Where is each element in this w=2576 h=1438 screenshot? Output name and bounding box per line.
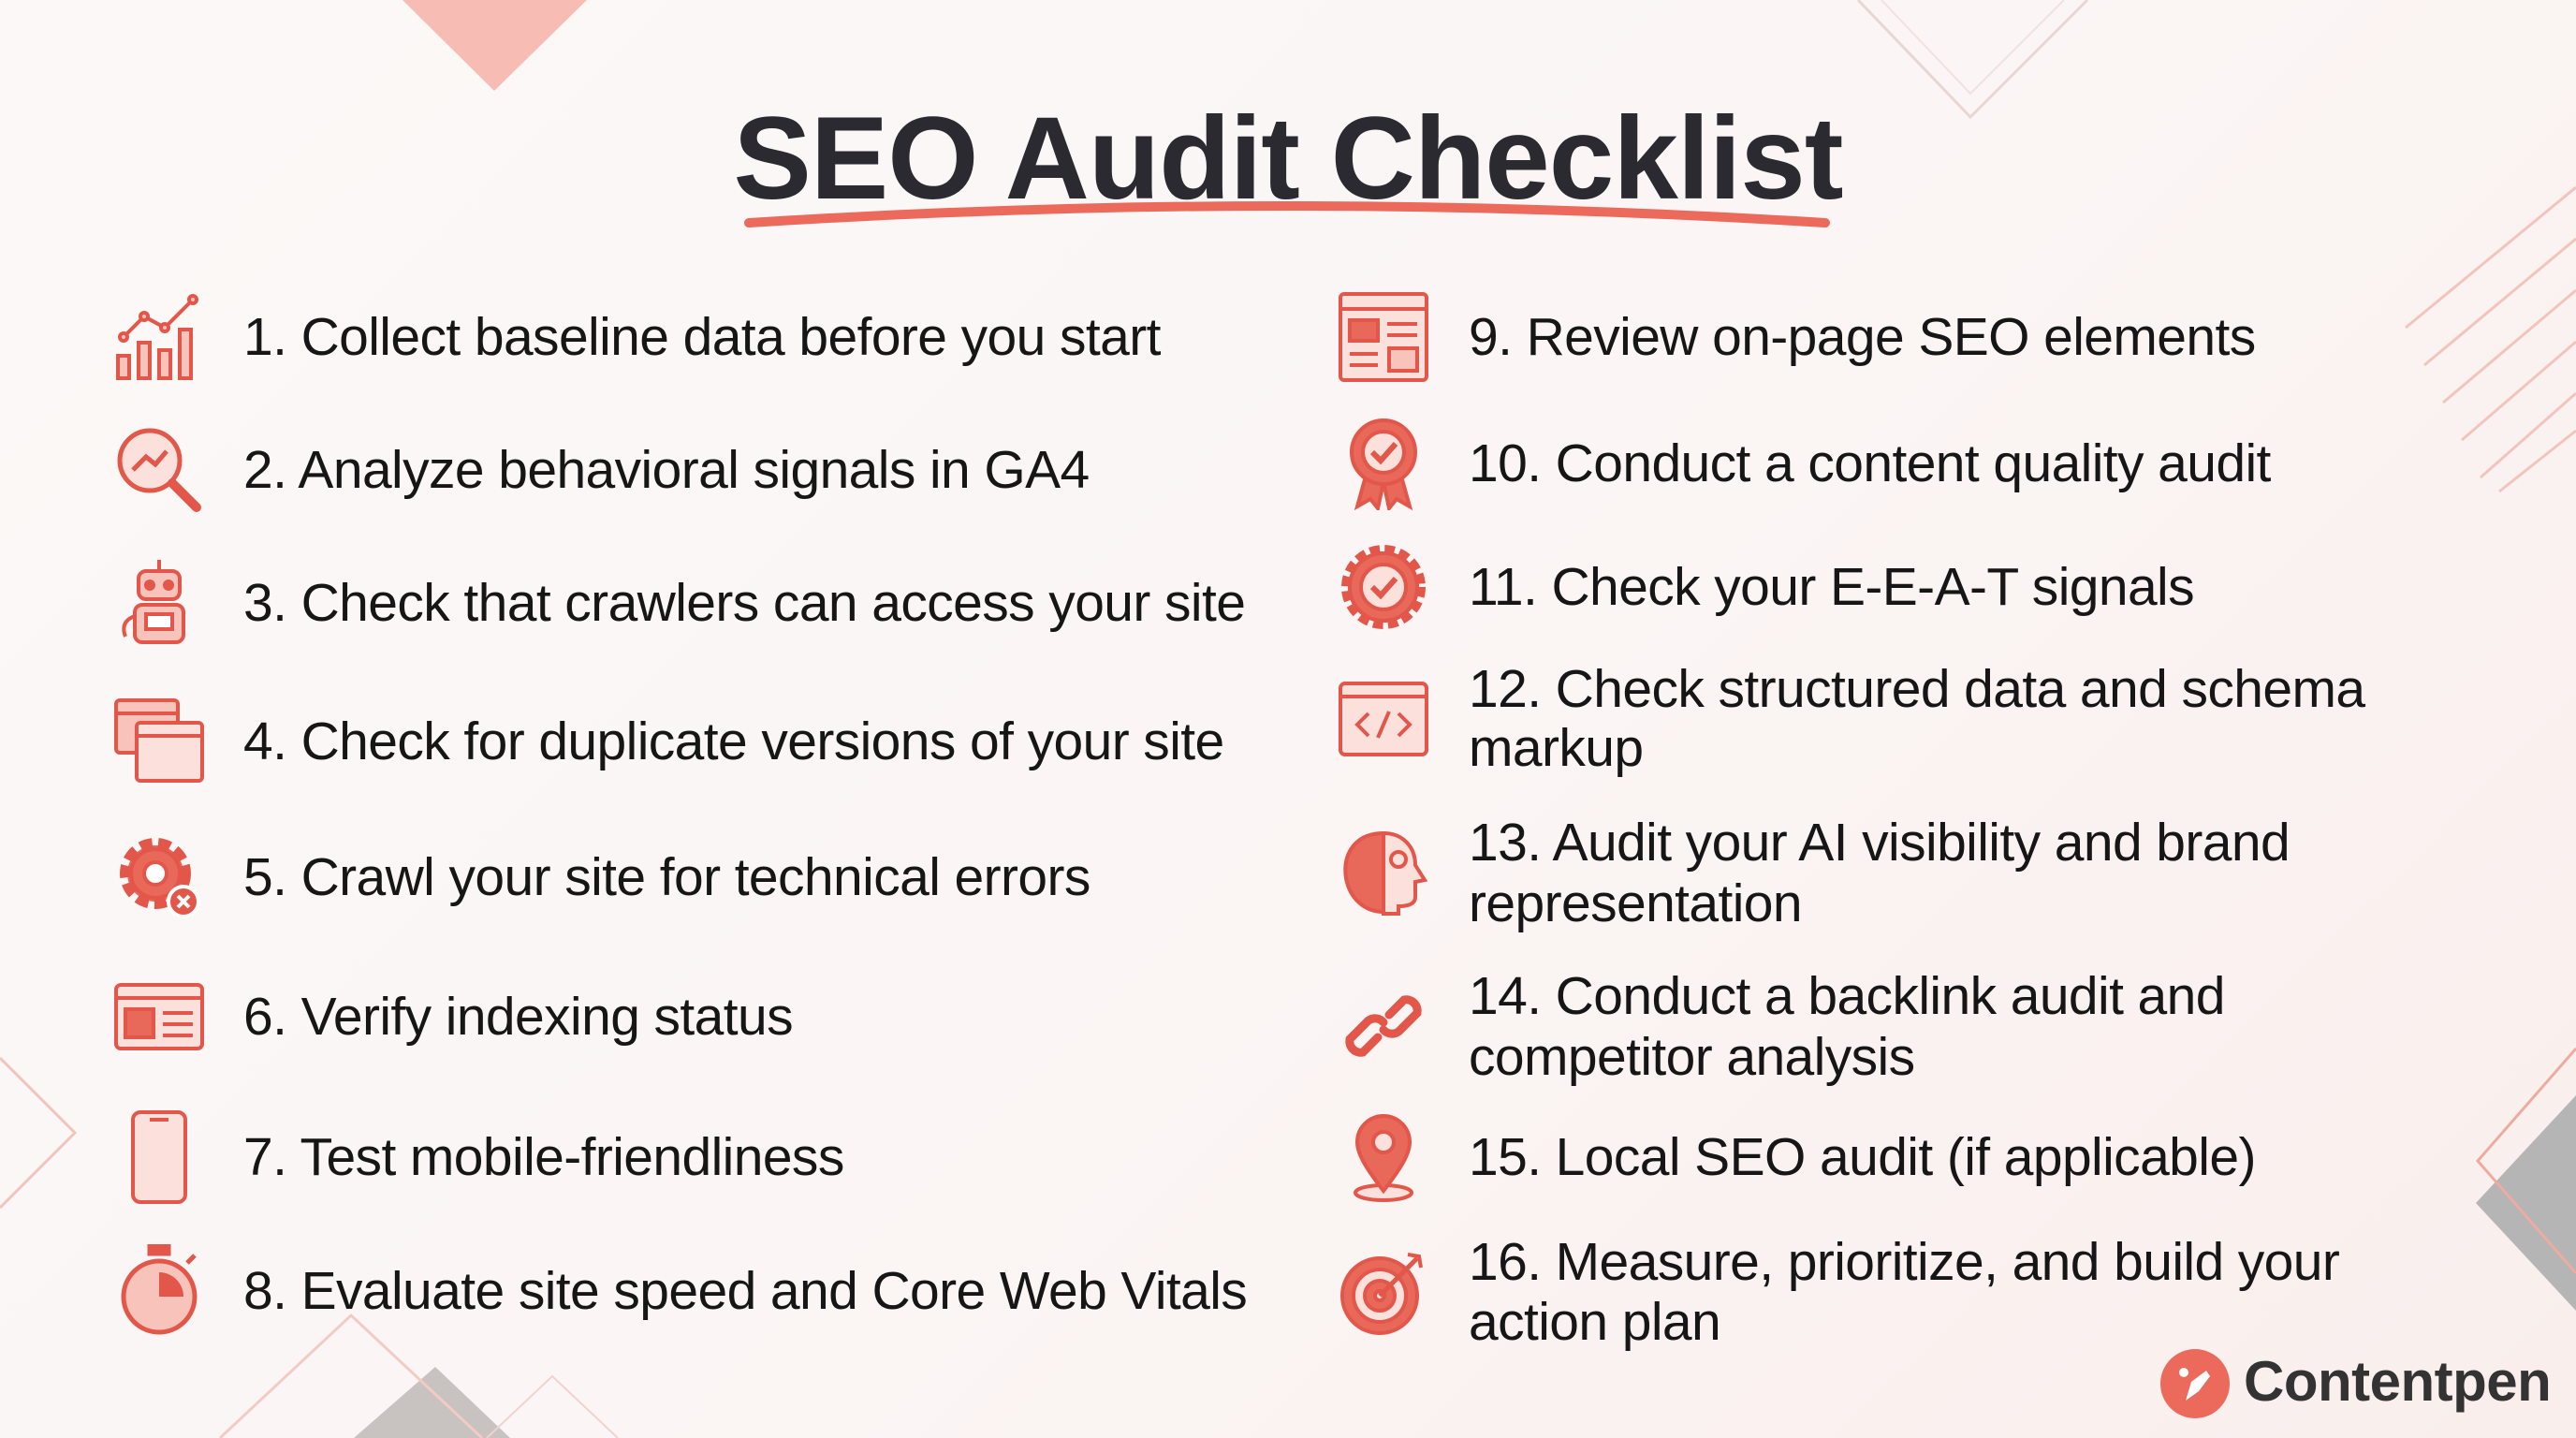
item 12: markup [1469,718,1643,778]
icon: badge check [1341,545,1426,629]
item 12 [1469,659,2366,778]
item 4: 4. Check for duplicate versions of your site [243,712,1224,771]
icon: robot [122,560,185,644]
item 7: 7. Test mobile-friendliness [243,1127,844,1187]
icon: target [1340,1253,1423,1335]
item 2: 2. Analyze behavioral signals in GA4 [243,440,1090,500]
item 12: 12. Check structured data and schema [1469,659,2364,719]
item 16 [1469,1232,2339,1352]
icon: link [1345,995,1422,1057]
icon: duplicate windows [114,698,204,783]
item 3: 3. Check that crawlers can access your site [243,573,1245,633]
item 1: 1. Collect baseline data before you start [243,307,1161,367]
panel: right column [1339,292,2366,1352]
logo: Contentpen [2160,1349,2551,1418]
item 6: 6. Verify indexing status [243,987,793,1047]
icon: code window [1339,682,1428,756]
icon: award ribbon [1350,418,1417,510]
item 16: 16. Measure, prioritize, and build your [1469,1232,2339,1292]
item 14: competitor analysis [1469,1027,1914,1087]
icon: phone [131,1110,187,1204]
icon: map pin [1354,1114,1413,1202]
icon: page elements [1339,292,1428,382]
title: SEO Audit Checklist [734,94,1842,224]
panel: left column [114,294,1247,1335]
icon: index page [114,983,204,1050]
item 15: 15. Local SEO audit (if applicable) [1469,1127,2256,1187]
icon: magnifier [118,429,201,512]
icon: AI head [1343,831,1428,916]
item 14: 14. Conduct a backlink audit and [1469,966,2225,1026]
title underline [744,201,1830,227]
item 13: representation [1469,873,1802,933]
item 14 [1469,966,2225,1087]
item 10: 10. Conduct a content quality audit [1469,433,2271,493]
logo text: Contentpen [2244,1350,2551,1413]
item 13 [1469,813,2290,933]
icon: stopwatch [122,1244,197,1335]
item 13: 13. Audit your AI visibility and brand [1469,813,2290,873]
item 8: 8. Evaluate site speed and Core Web Vitals [243,1261,1247,1321]
item 16: action plan [1469,1292,1720,1352]
icon: bar chart [116,294,198,380]
item 11: 11. Check your E-E-A-T signals [1469,557,2194,617]
item 9: 9. Review on-page SEO elements [1469,307,2256,367]
icon: gear error [120,838,200,918]
item 5: 5. Crawl your site for technical errors [243,847,1090,907]
icon: logo mark [2160,1349,2230,1418]
